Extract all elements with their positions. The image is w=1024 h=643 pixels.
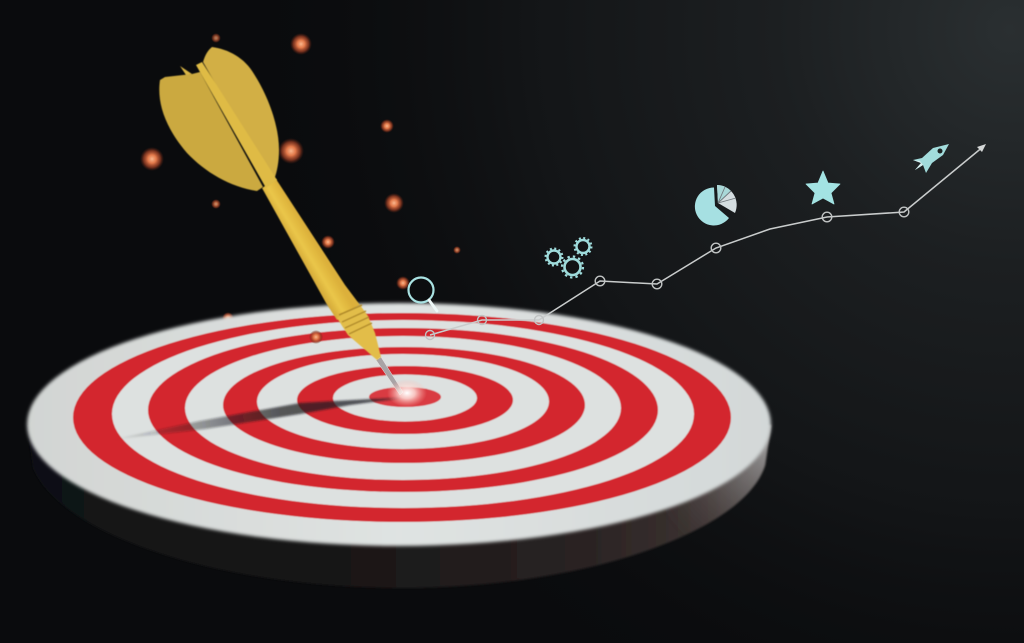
dart grip	[337, 305, 381, 360]
dart	[159, 47, 403, 395]
icon: pie chart	[695, 185, 737, 225]
dart shadow	[110, 398, 402, 440]
board face rings	[27, 303, 771, 546]
growth line chart	[426, 144, 986, 340]
board side edge	[27, 425, 771, 588]
dart needle	[376, 357, 403, 395]
icon: gears	[546, 238, 592, 278]
glowing orbs	[140, 33, 461, 324]
icon: rocket	[913, 144, 949, 173]
sparkle at bullseye	[387, 379, 427, 407]
icon: magnifier	[408, 278, 437, 311]
rim highlight	[27, 425, 771, 588]
icon: star	[806, 171, 840, 204]
dart shaft	[262, 179, 360, 320]
orb over board	[309, 330, 323, 344]
target board	[27, 303, 771, 588]
dart flight	[159, 47, 279, 191]
